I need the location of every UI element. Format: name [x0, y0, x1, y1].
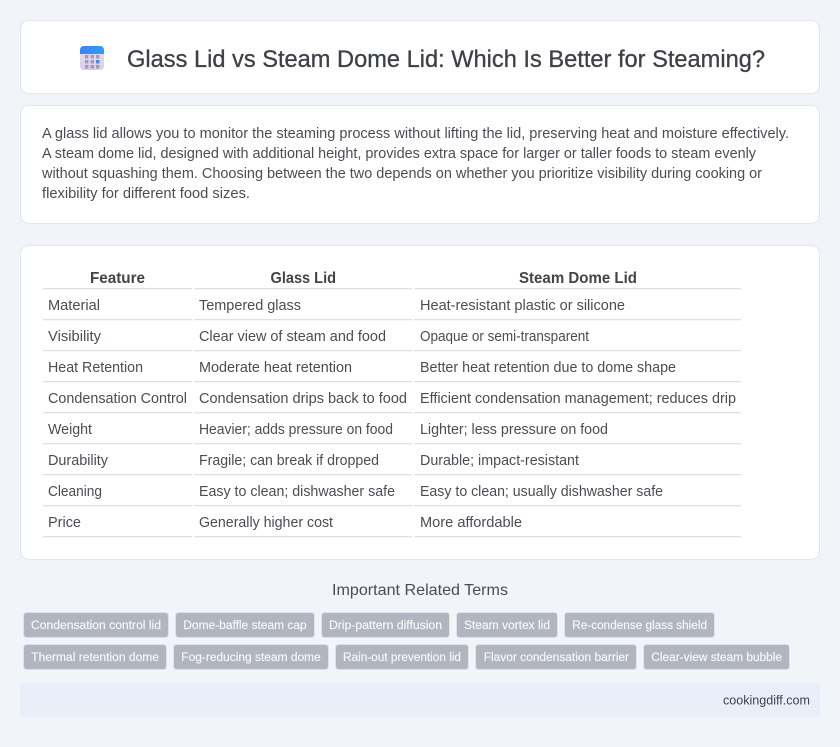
row: cleaning: Cleaning [48, 484, 102, 500]
row: visibility: Opaque or semi-transparent [420, 329, 589, 345]
tag: Thermal retention dome [31, 650, 159, 664]
tag: Rain-out prevention lid [343, 650, 461, 664]
tag: Clear-view steam bubble [651, 650, 782, 664]
footer [20, 683, 820, 717]
tag: Re-condense glass shield [572, 618, 707, 632]
tag [476, 644, 636, 670]
row: weight: Weight [48, 422, 92, 438]
tag [176, 612, 314, 638]
tag: Flavor condensation barrier [484, 650, 629, 664]
row: price: More affordable [420, 515, 522, 531]
row: heat retention: Better heat retention due to dome shape [420, 360, 676, 376]
heading: Glass Lid vs Steam Dome Lid: Which Is Better for Steaming? [127, 46, 765, 73]
row: visibility: Clear view of steam and food [199, 329, 386, 345]
tag [174, 644, 328, 670]
text block: introduction: A glass lid allows you to monitor the steaming process without lifting the lid, preserving heat and moisture effectively. [42, 126, 789, 142]
row: material [43, 298, 741, 320]
row: durability: Fragile; can break if dropped [199, 453, 379, 469]
row: material: Heat-resistant plastic or silicone [420, 298, 625, 314]
text block: introduction [41, 126, 789, 202]
tag [24, 644, 166, 670]
row: durability: Durable; impact-resistant [420, 453, 579, 469]
row: heat retention: Heat Retention [48, 360, 143, 376]
tag [336, 644, 468, 670]
text block: introduction: flexibility for different food sizes. [42, 186, 250, 202]
tag: Drip-pattern diffusion [329, 618, 442, 632]
row: durability: Durability [48, 453, 109, 469]
tag [564, 612, 714, 638]
row: visibility: Visibility [48, 329, 102, 345]
row: material: Material [48, 298, 100, 314]
row: weight: Lighter; less pressure on food [420, 422, 608, 438]
row: heat retention [43, 360, 741, 382]
tag: Steam vortex lid [464, 618, 550, 632]
row: condensation control: Condensation Control [48, 391, 187, 407]
row: price: Price [48, 515, 81, 531]
footer source: cookingdiff.com [723, 694, 810, 708]
icon: calendar [80, 46, 104, 70]
row: durability [43, 453, 741, 475]
table header: Steam Dome Lid [519, 270, 637, 287]
table header [43, 270, 741, 289]
text block: introduction: A steam dome lid, designed with additional height, provides extra space for larger or taller foods to steam evenly [42, 146, 757, 162]
row: price: Generally higher cost [199, 515, 333, 531]
row: condensation control [43, 391, 741, 413]
row: price [43, 515, 741, 537]
row: weight: Heavier; adds pressure on food [199, 422, 393, 438]
tag [24, 612, 168, 638]
row: cleaning: Easy to clean; usually dishwasher safe [420, 484, 663, 500]
table header: Glass Lid [270, 270, 336, 287]
row: heat retention: Moderate heat retention [199, 360, 352, 376]
row: visibility [43, 329, 741, 351]
row: condensation control: Efficient condensation management; reduces drip [420, 391, 736, 407]
tag: Condensation control lid [31, 618, 161, 632]
tag: Fog-reducing steam dome [181, 650, 321, 664]
panel: title [20, 20, 820, 94]
tag [456, 612, 558, 638]
row: material: Tempered glass [199, 298, 301, 314]
panel: introduction [20, 106, 820, 224]
row: condensation control: Condensation drips back to food [199, 391, 407, 407]
tag [644, 644, 790, 670]
heading: related terms: Important Related Terms [332, 582, 508, 599]
row: weight [43, 422, 741, 444]
tag [322, 612, 450, 638]
row: cleaning: Easy to clean; dishwasher safe [199, 484, 395, 500]
tag: Dome-baffle steam cap [183, 618, 307, 632]
related term tags [24, 612, 790, 670]
text block: introduction: without squashing them. Choosing between the two depends on whether you prioritize visibility during cooking or [41, 166, 762, 182]
table header: Feature [90, 270, 145, 287]
row: cleaning [43, 484, 741, 506]
panel: comparison table [20, 246, 820, 560]
